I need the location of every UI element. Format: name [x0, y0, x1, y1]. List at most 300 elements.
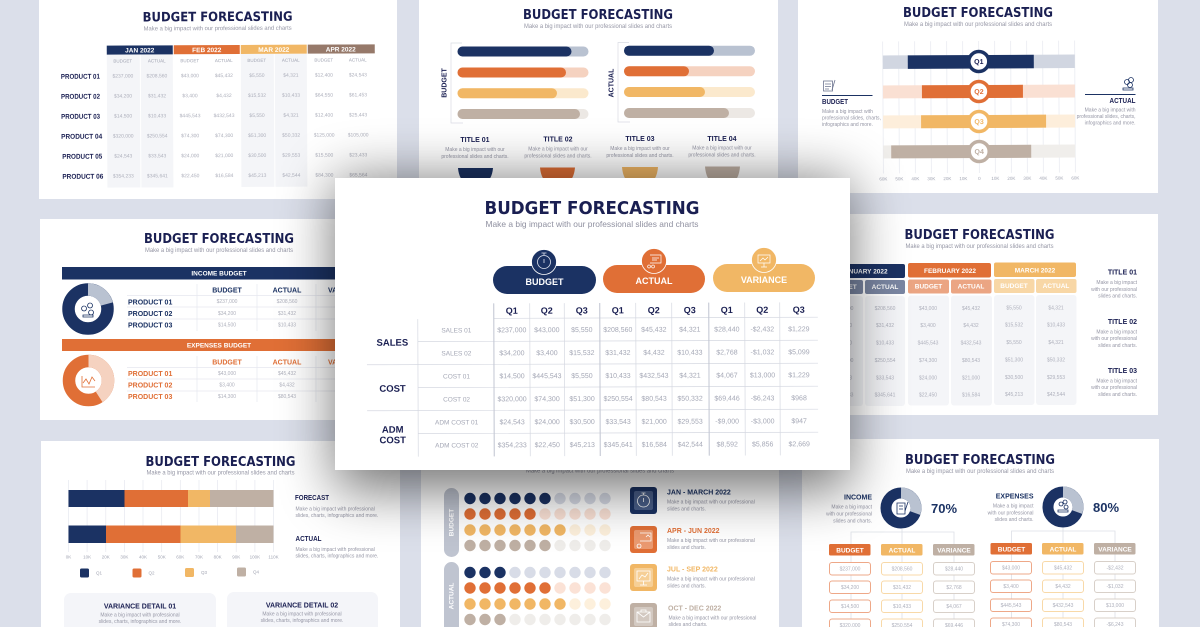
values: $30,500	[1005, 375, 1023, 381]
values: $42,544	[678, 442, 703, 449]
text block: side titles: slides and charts.	[1098, 294, 1137, 300]
values: -$2,432	[750, 326, 774, 333]
heading: panel 2 title: BUDGET FORECASTING	[523, 8, 673, 23]
values: $74,300	[534, 396, 560, 403]
panel: main budget forecasting table	[335, 178, 850, 470]
table: expenses: ACTUAL	[273, 360, 302, 366]
text block: income	[826, 494, 873, 524]
row labels: COST 02	[443, 396, 470, 404]
card: variance detail 02	[227, 592, 378, 627]
values: $84,300	[315, 173, 334, 179]
panel: budget vs actual progress bars	[419, 0, 778, 184]
grid	[68, 480, 274, 552]
table: expenses: $43,000	[218, 371, 236, 377]
month headers: MARCH 2022	[1015, 268, 1056, 274]
dots: budget	[464, 493, 611, 551]
table: expenses: $3,400	[219, 382, 235, 388]
values: $29,553	[1047, 375, 1065, 381]
text block: oct-dec: Make a big impact with our professional	[668, 616, 756, 622]
values: $250,554	[603, 396, 633, 403]
quarter markers: Q2	[974, 89, 984, 96]
card: variance detail 01: VARIANCE DETAIL 01	[104, 604, 176, 610]
values: $445,543	[532, 373, 562, 380]
value boxes: income: $34,200	[841, 585, 859, 591]
values: $45,213	[248, 173, 267, 179]
text block: expenses: Make a big impact	[993, 504, 1034, 510]
values: $4,321	[1048, 306, 1064, 312]
text block: titles with descriptions: professional slides and charts.	[524, 154, 592, 160]
values: $4,321	[1048, 340, 1064, 346]
row labels: SALES 01	[441, 327, 472, 335]
value boxes: expenses: $4,432	[1055, 584, 1071, 590]
values: -$1,032	[751, 349, 774, 356]
row groups: COST	[379, 384, 406, 395]
values: $4,321	[283, 73, 299, 79]
text block: side titles: Make a big impact	[1096, 280, 1138, 286]
values: $33,543	[605, 419, 631, 426]
value boxes: expenses	[990, 562, 1136, 627]
table: income: $10,433	[278, 322, 296, 328]
values: $45,432	[215, 73, 233, 79]
sub column labels: ACTUAL	[349, 57, 367, 62]
values: $45,432	[641, 327, 667, 334]
value boxes: expenses: $43,000	[1002, 566, 1020, 572]
month headers: FEB 2022	[192, 47, 222, 54]
table: budget, actual and variance by quarter	[367, 302, 818, 457]
icon: clipboard	[824, 80, 835, 91]
axis labels: 0K	[66, 554, 71, 560]
axis labels: 50K	[1055, 176, 1063, 181]
row labels: ADM COST 01	[435, 419, 479, 427]
card: variance detail 01: slides, charts, infographics and more.	[99, 619, 181, 625]
values: $354,233	[113, 174, 134, 180]
sub headers: BUDGET	[1000, 283, 1028, 290]
icon tile: stopwatch	[630, 487, 657, 514]
value boxes: expenses: $13,000	[1106, 603, 1124, 609]
axis labels: 60K	[879, 176, 887, 181]
values: $13,000	[750, 372, 775, 379]
text block: titles with descriptions: Make a big impact with our	[610, 146, 670, 152]
table: expenses: PRODUCT 02	[128, 382, 172, 390]
pill: budget	[493, 250, 596, 294]
values: $10,433	[282, 93, 300, 99]
text block: jan-march: slides and charts.	[667, 506, 706, 512]
values: $24,543	[114, 154, 133, 160]
panel: monthly budget cards	[820, 214, 1158, 415]
text block: titles with descriptions: professional slides and charts.	[606, 153, 674, 159]
headers: income columns: BUDGET	[836, 548, 864, 554]
panel: income and expenses budget	[40, 219, 364, 420]
text block: titles with descriptions: professional slides and charts.	[688, 152, 756, 158]
month headers: FEBRUARY 2022	[924, 268, 976, 275]
text block: titles with descriptions: Make a big impact with our	[445, 147, 505, 153]
legend: Q2	[148, 570, 155, 576]
row labels: PRODUCT 01	[61, 74, 100, 81]
panel: dot matrix budget	[421, 440, 779, 627]
axis labels: 50K	[895, 176, 903, 181]
values: $208,560	[875, 306, 896, 312]
axis labels: 100K	[250, 554, 260, 560]
label pill: actual: ACTUAL	[448, 583, 456, 609]
month headers	[822, 262, 1076, 278]
axis labels	[66, 554, 279, 560]
values: $15,532	[569, 350, 595, 357]
axis labels: 60K	[176, 554, 184, 560]
values: $50,332	[677, 396, 703, 403]
values: $74,300	[919, 358, 937, 364]
axis labels: 20K	[102, 554, 110, 560]
values: -$6,243	[751, 395, 775, 402]
values: $65,564	[349, 172, 368, 178]
panel: stacked bar forecast	[41, 441, 400, 627]
chart: income donut	[886, 493, 916, 523]
table: income: ACTUAL	[273, 288, 302, 294]
text block: forecast and actual: slides, charts, infographics and more.	[296, 554, 378, 560]
pill: budget: BUDGET	[526, 277, 564, 287]
text block: side titles: Make a big impact	[1096, 378, 1138, 384]
row labels: PRODUCT 05	[62, 154, 102, 161]
values: $4,432	[643, 350, 665, 357]
table grid	[367, 302, 818, 457]
value boxes: income: $31,432	[893, 585, 911, 591]
sub headers	[822, 279, 1076, 294]
text block: jul-sep: JUL - SEP 2022	[667, 566, 718, 574]
values: -$3,000	[751, 418, 775, 425]
values: $1,229	[788, 326, 810, 333]
values: $80,543	[641, 396, 667, 403]
row groups	[377, 338, 409, 446]
subtitle: panel 2: Make a big impact with our professional slides and charts	[524, 24, 672, 30]
values: $4,432	[216, 93, 232, 99]
headers: income columns: ACTUAL	[889, 548, 915, 554]
subtitle: main: Make a big impact with our professional slides and charts	[486, 219, 698, 229]
text block: expenses	[988, 494, 1034, 523]
column headers	[506, 305, 805, 316]
row labels: PRODUCT 04	[61, 134, 102, 141]
values: $15,532	[248, 93, 266, 99]
legend: Q1	[96, 570, 102, 576]
values: $34,200	[834, 323, 852, 329]
text block: side titles: with our professional	[1091, 385, 1137, 391]
text block: jan-march	[667, 490, 755, 512]
headers: expenses columns: ACTUAL	[1050, 546, 1076, 554]
text block: income: slides and charts.	[833, 518, 872, 524]
values: $43,000	[181, 73, 199, 79]
subtitle: panel 4: Make a big impact with our professional slides and charts	[145, 248, 293, 254]
text block: budget: professional slides, charts,	[822, 116, 881, 122]
quarter markers: Q1	[974, 59, 984, 66]
chart: actual stacked bar	[68, 526, 274, 543]
values: $16,584	[642, 442, 667, 449]
subtitle: panel 7: Make a big impact with our professional slides and charts	[526, 468, 674, 474]
panel: quarterly tornado chart	[798, 0, 1158, 193]
values: $31,432	[876, 323, 894, 329]
values: $10,433	[677, 350, 703, 357]
text block: side titles: slides and charts.	[1098, 392, 1137, 398]
heading: main title: BUDGET FORECASTING	[484, 198, 700, 219]
axis labels: 80K	[214, 554, 222, 560]
text block: titles with descriptions: Make a big impact with our	[528, 146, 588, 152]
table: income: PRODUCT 01	[128, 300, 172, 306]
panel: income and expenses percentages	[802, 439, 1159, 627]
value boxes: income: $4,067	[946, 604, 962, 610]
values: $25,443	[349, 112, 367, 118]
text block: titles with descriptions: TITLE 04	[707, 136, 737, 143]
values: $33,543	[876, 376, 894, 382]
values: $5,550	[249, 73, 265, 79]
banner: expenses budget	[62, 339, 342, 351]
chart: actual bars: ACTUAL	[608, 68, 616, 97]
pill: actual	[603, 248, 705, 293]
sub column labels: ACTUAL	[282, 58, 300, 63]
values: $43,000	[534, 327, 560, 334]
text block: expenses: EXPENSES	[996, 494, 1034, 500]
row labels: PRODUCT 02	[61, 94, 100, 101]
row labels: PRODUCT 06	[62, 174, 103, 181]
text block: jan-march: Make a big impact with our professional	[667, 500, 755, 506]
quarter markers: Q4	[975, 149, 984, 156]
value boxes: expenses: $3,400	[1003, 584, 1019, 590]
values: $22,450	[181, 173, 200, 179]
values: $61,453	[349, 92, 367, 98]
values: $10,433	[876, 340, 894, 346]
column shading	[107, 54, 307, 188]
axis labels: 0	[978, 176, 981, 181]
axis labels: 40K	[139, 554, 147, 560]
table: income: VARIANCE	[328, 288, 364, 294]
table: expenses	[127, 356, 364, 402]
text block: budget: BUDGET	[822, 99, 849, 106]
table: income: $14,500	[218, 322, 236, 328]
axis labels: 40K	[1039, 176, 1047, 181]
month headers: JANUARY 2022	[840, 268, 888, 276]
values: $10,433	[148, 113, 166, 119]
chart: diverging bars	[883, 55, 1075, 158]
sub column labels: BUDGET	[113, 59, 132, 64]
values: $30,500	[569, 419, 595, 426]
icon: coins	[1123, 78, 1134, 90]
row groups: ADM	[382, 425, 404, 436]
text block: side titles: TITLE 02	[1108, 319, 1137, 326]
values: $15,500	[315, 153, 334, 159]
text block: income: with our professional	[826, 512, 872, 518]
text block: forecast and actual: ACTUAL	[296, 536, 322, 543]
value boxes: expenses: $45,432	[1054, 566, 1072, 572]
values: $42,544	[1047, 392, 1065, 398]
table: expenses: VARIANCE	[328, 360, 364, 366]
values: $345,641	[875, 392, 896, 398]
table: expenses: $45,432	[278, 371, 296, 377]
text block: actual	[1077, 94, 1136, 126]
value boxes: income: $237,000	[840, 566, 861, 572]
row labels: SALES 02	[441, 350, 472, 358]
values: $31,432	[605, 350, 631, 357]
row labels: PRODUCT 03	[61, 114, 100, 121]
values: $21,000	[215, 153, 234, 159]
column headers: Q2	[756, 305, 768, 315]
value boxes: expenses: $432,543	[1053, 603, 1074, 609]
values: $237,000	[833, 306, 854, 312]
text block: budget: infographics and more.	[822, 122, 873, 128]
text block: actual: ACTUAL	[1110, 98, 1136, 105]
headers: expenses columns: BUDGET	[998, 546, 1025, 554]
values: $5,550	[1006, 306, 1022, 312]
text block: income: Make a big impact	[831, 504, 873, 510]
values: $432,543	[214, 113, 235, 119]
value boxes: expenses: -$2,432	[1107, 566, 1124, 572]
values: $4,321	[679, 327, 701, 334]
values: $5,550	[1006, 340, 1022, 346]
text block: actual: Make a big impact with	[1085, 108, 1136, 114]
values: $445,543	[180, 113, 201, 119]
pill: variance: VARIANCE	[741, 275, 787, 285]
label pill: actual	[444, 562, 459, 627]
values: $22,450	[535, 442, 560, 449]
values: $69,446	[714, 395, 740, 403]
label pill: budget: BUDGET	[448, 509, 456, 536]
table: income: $208,560	[277, 299, 298, 305]
values: $50,332	[282, 133, 300, 139]
banner: income budget: INCOME BUDGET	[191, 271, 247, 278]
table: expenses: PRODUCT 01	[128, 371, 172, 378]
text block: budget: Make a big impact with	[822, 109, 873, 115]
values: $3,400	[182, 93, 198, 99]
axis labels: 70K	[195, 554, 203, 560]
value boxes: income: $28,440	[945, 566, 963, 572]
values: $29,553	[282, 153, 301, 159]
column headers: Q2	[541, 306, 553, 316]
values: $16,584	[962, 392, 980, 398]
values: $5,550	[249, 113, 265, 119]
values: $237,000	[497, 327, 527, 334]
axis labels: 10K	[83, 554, 91, 560]
axis labels: 60K	[1071, 176, 1079, 181]
axis labels: 20K	[943, 176, 951, 181]
text block: oct-dec: OCT - DEC 2022	[668, 606, 721, 612]
text block: income: INCOME	[844, 494, 872, 502]
row groups: SALES	[377, 338, 408, 349]
row labels	[61, 74, 103, 181]
text block: apr-jun	[667, 528, 755, 551]
column headers: Q1	[506, 306, 518, 316]
axis labels: 90K	[232, 554, 240, 560]
sub column labels: BUDGET	[180, 58, 199, 63]
sub headers: ACTUAL	[872, 284, 898, 291]
text block: forecast and actual: slides, charts, infographics and more.	[296, 513, 378, 519]
pill: actual: ACTUAL	[636, 276, 673, 286]
axis labels: 30K	[927, 176, 935, 181]
panel: monthly product budget table	[39, 0, 397, 199]
subtitle: panel 1: Make a big impact with our professional slides and charts	[144, 26, 292, 32]
row labels: ADM COST 02	[435, 442, 479, 450]
sub headers: BUDGET	[829, 284, 857, 291]
table: expenses: $4,432	[279, 382, 295, 388]
values: $45,432	[962, 306, 980, 312]
values: $208,560	[146, 73, 168, 79]
legend	[80, 568, 259, 578]
values: $354,233	[833, 392, 854, 398]
text block: titles with descriptions: TITLE 02	[543, 136, 573, 144]
values: $3,400	[536, 350, 558, 357]
values: $432,543	[961, 340, 982, 346]
text block: titles with descriptions: TITLE 03	[625, 136, 655, 143]
heading: panel 8 title: BUDGET FORECASTING	[905, 453, 1055, 468]
icon tile: presentation	[630, 526, 657, 553]
values: $23,433	[349, 152, 368, 158]
values: $51,300	[1005, 358, 1023, 364]
values: $250,554	[147, 133, 168, 139]
values: $968	[791, 395, 807, 402]
chart: expenses donut	[69, 361, 108, 400]
values: $2,669	[789, 441, 810, 448]
subtitle: panel 5: Make a big impact with our professional slides and charts	[906, 244, 1054, 250]
text block: side titles: slides and charts.	[1098, 343, 1137, 349]
month headers: MAR 2022	[258, 47, 290, 54]
text block: side titles: TITLE 03	[1108, 368, 1137, 375]
table: income: $34,200	[218, 311, 236, 317]
table: income: PRODUCT 02	[128, 311, 172, 318]
stat: 80 percent: 80%	[1093, 500, 1119, 515]
values: -$9,000	[715, 418, 739, 426]
text block: titles with descriptions: Make a big impact with our	[692, 146, 752, 152]
values: $2,768	[716, 349, 738, 357]
column headers: Q1	[612, 305, 624, 315]
text block: budget	[822, 95, 881, 128]
values: $51,300	[248, 133, 266, 139]
icon tile: briefcase	[630, 603, 657, 627]
heading: panel 1 title: BUDGET FORECASTING	[143, 10, 293, 25]
table: income: BUDGET	[212, 288, 242, 294]
sub column labels: ACTUAL	[215, 58, 233, 63]
card: variance detail 02: Make a big impact with professional	[262, 612, 342, 618]
column headers: Q3	[576, 306, 588, 316]
axis labels: 20K	[1007, 176, 1015, 181]
quarter markers: Q3	[974, 119, 984, 126]
values: $5,099	[788, 349, 810, 356]
text block: jan-march: JAN - MARCH 2022	[667, 490, 731, 496]
text block: apr-jun: slides and charts.	[667, 545, 706, 551]
heading: panel 6 title: BUDGET FORECASTING	[146, 455, 296, 470]
values: $14,500	[834, 340, 852, 346]
values: $64,550	[315, 93, 333, 99]
values: $237,000	[112, 74, 134, 80]
legend: Q3	[201, 570, 207, 575]
table: expenses: PRODUCT 03	[128, 394, 172, 401]
values: $3,400	[920, 323, 936, 329]
text block: actual: infographics and more.	[1085, 120, 1136, 126]
values: $4,067	[716, 372, 738, 380]
text block: oct-dec	[668, 606, 756, 627]
chart: income donut	[68, 290, 108, 328]
text block: forecast and actual: Make a big impact with professional	[296, 506, 375, 512]
quarter markers	[969, 51, 989, 162]
axis labels: 40K	[911, 176, 919, 181]
card: variance detail 01	[64, 593, 216, 627]
values: $1,229	[788, 372, 810, 379]
values: $105,000	[348, 132, 369, 138]
table: income	[127, 284, 364, 331]
values: $250,554	[875, 358, 896, 364]
values: $4,321	[283, 113, 299, 119]
column headers: Q2	[648, 305, 660, 315]
text block: apr-jun: APR - JUN 2022	[667, 528, 720, 535]
values: $24,000	[919, 376, 937, 382]
icon tile: chart board	[630, 564, 657, 591]
row labels: COST 01	[443, 373, 470, 381]
value boxes: income: $2,768	[946, 585, 962, 591]
values: $24,000	[534, 419, 560, 426]
values: $125,000	[314, 133, 335, 139]
